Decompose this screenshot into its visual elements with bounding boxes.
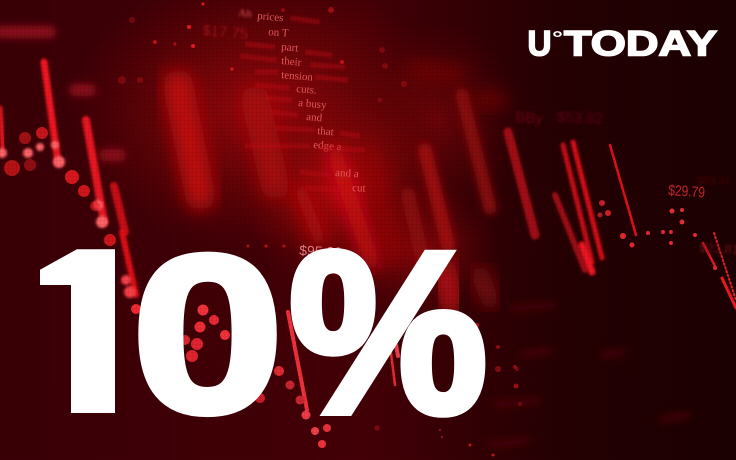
text block: blurred news article: on T [268,26,289,40]
text block: blurred news article: and a [335,167,359,180]
text: blurred price labels: $17.75 [202,22,249,43]
text: price label $29.79: $29.79 [668,182,706,201]
logo: U°TODAY: U [528,24,552,64]
text: blurred price labels: BBy [515,109,544,127]
chart: sharp red candlesticks [0,62,736,410]
logo: U°TODAY: TODAY [564,24,717,64]
text: blurred price labels: $83.31 [697,175,731,187]
text: price label $95.00: $95.00 [299,242,343,260]
text block: blurred news article: prices [257,10,284,24]
text block: blurred news article [238,7,366,195]
text block: blurred news article: cuts. [296,83,317,97]
headline: 10%: % [289,205,487,460]
text block: blurred news article: that [317,125,334,138]
background: red glow areas [70,0,520,320]
chart: faint lower right trading rows [490,305,690,445]
headline: 10%: 0 [131,209,285,460]
text block: blurred news article: tension [281,69,314,84]
headline: 10%: 1 [14,205,164,460]
text: blurred price labels [202,22,736,257]
chart: blurred wide candlesticks [0,32,535,425]
text block: blurred news article: Ah [238,7,253,20]
headline: 10% [40,248,486,418]
logo: U°TODAY [528,24,717,64]
logo: U°TODAY: ° [552,28,563,48]
chart: bright highlights on candlesticks [0,141,136,298]
text: blurred price labels: $53.82 [557,109,603,128]
text block: blurred news article: and [306,111,323,124]
text block: blurred news article: edge a [313,139,342,153]
text block: blurred news article: part [281,41,299,54]
text block: blurred news article: a busy [298,97,328,112]
text block: blurred news article: their [281,55,302,69]
text block: blurred news article: cut [352,182,366,195]
